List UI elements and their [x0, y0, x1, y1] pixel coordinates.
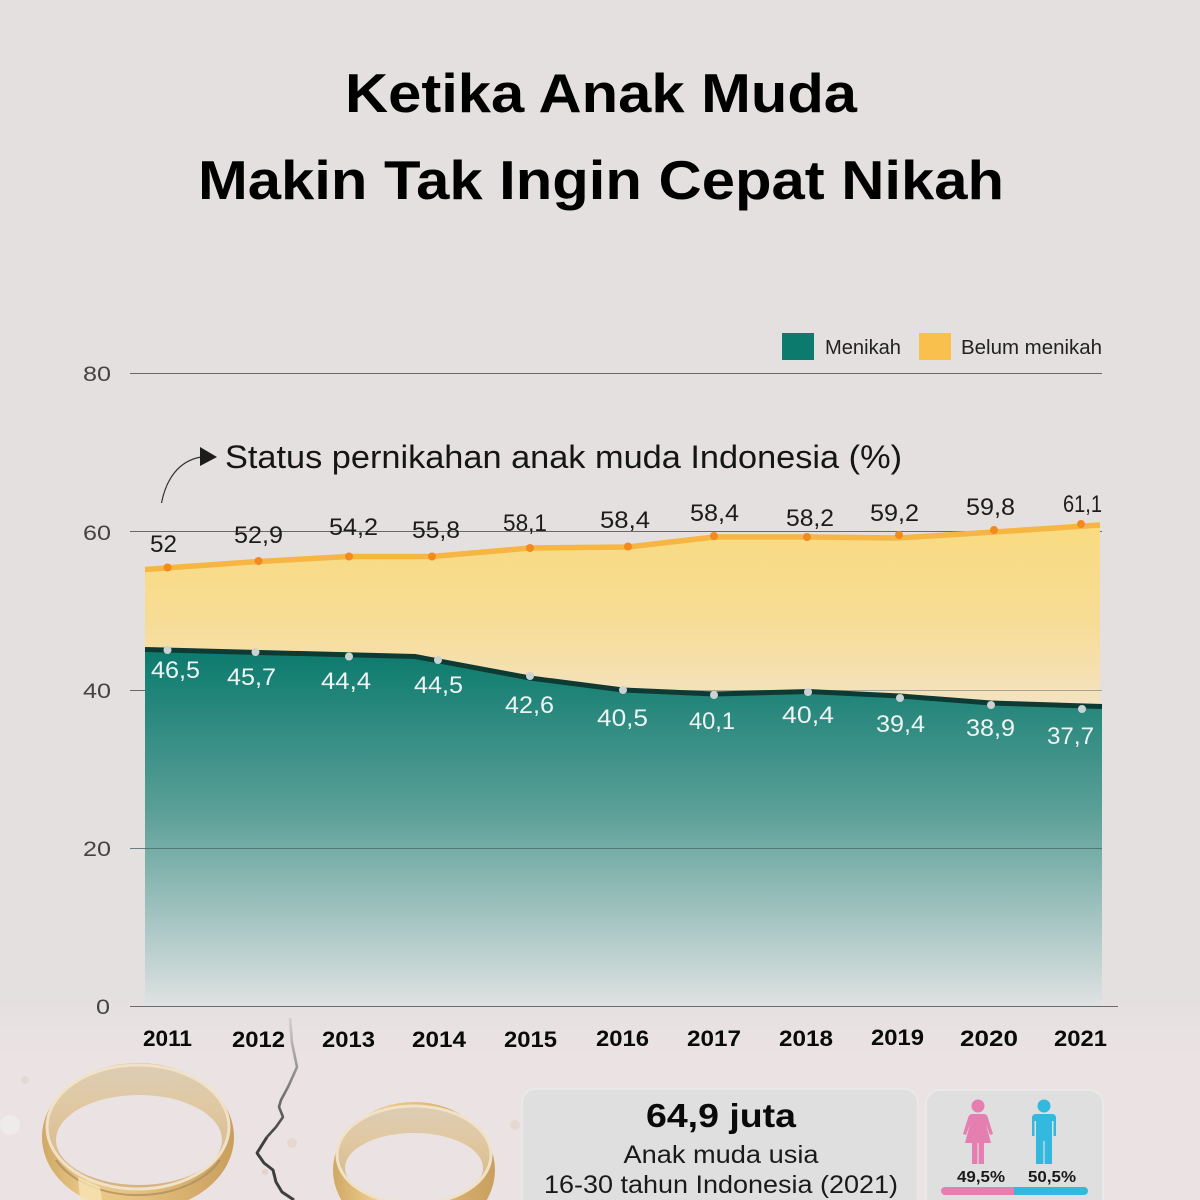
values: menikah: 42,6	[505, 692, 554, 719]
values: menikah: 37,7	[1047, 723, 1094, 750]
values: menikah: 44,5	[414, 672, 463, 699]
title: Makin Tak Ingin Cepat Nikah	[198, 149, 1004, 211]
values: belum menikah: 61,1	[1063, 491, 1102, 518]
values: belum menikah: 59,2	[870, 500, 919, 527]
grid lines over the areas	[130, 690, 1118, 1006]
values: belum menikah: 58,2	[786, 505, 834, 532]
legend: Belum menikah	[961, 337, 1102, 359]
x axis years: 2019	[871, 1025, 924, 1050]
x axis years: 2016	[596, 1026, 649, 1051]
arrow	[162, 447, 217, 503]
values: belum menikah: 52,9	[234, 522, 283, 549]
card description: Anak muda usia	[624, 1141, 819, 1169]
y axis labels	[83, 363, 111, 1019]
card description: 16-30 tahun Indonesia (2021)	[544, 1171, 898, 1199]
gender percentages: 49,5%	[957, 1169, 1005, 1186]
icon: woman	[963, 1100, 993, 1164]
right ring	[333, 1102, 495, 1200]
gender ratio bar	[941, 1187, 1088, 1195]
left ring	[42, 1063, 234, 1200]
icon: man	[1032, 1100, 1056, 1164]
x axis years: 2012	[232, 1027, 285, 1052]
values: belum menikah: 58,1	[503, 510, 547, 537]
area: belum menikah	[145, 527, 1100, 720]
values: menikah: 40,4	[782, 702, 834, 729]
x axis years: 2011	[143, 1026, 192, 1051]
x axis years: 2013	[322, 1027, 375, 1052]
grid lines behind the areas	[130, 374, 1102, 690]
values: menikah: 38,9	[966, 715, 1015, 742]
title	[198, 62, 1004, 211]
values: menikah: 40,5	[597, 705, 648, 732]
chart subtitle: Status pernikahan anak muda Indonesia (%)	[225, 439, 902, 475]
x axis years: 2015	[504, 1027, 557, 1052]
markers: belum menikah	[164, 520, 1085, 572]
values: menikah: 39,4	[876, 711, 925, 738]
values: belum menikah: 58,4	[690, 500, 739, 527]
values: belum menikah: 54,2	[329, 514, 378, 541]
gender percentages	[957, 1169, 1076, 1186]
card description	[544, 1141, 898, 1199]
legend	[782, 333, 1102, 360]
y axis labels: 40	[83, 680, 111, 703]
values: belum menikah: 55,8	[412, 517, 460, 544]
x axis years: 2018	[779, 1026, 833, 1051]
photo background: sand surface	[0, 1000, 1200, 1200]
y axis labels: 0	[96, 996, 110, 1019]
total value: 64,9 juta	[646, 1097, 797, 1134]
values: belum menikah: 58,4	[600, 507, 650, 534]
gender percentages: 50,5%	[1028, 1169, 1076, 1186]
legend: Menikah	[825, 337, 901, 359]
x axis years: 2017	[687, 1026, 741, 1051]
card: gender split	[926, 1090, 1103, 1200]
y axis labels: 60	[83, 522, 111, 545]
x axis years: 2014	[412, 1027, 467, 1052]
x axis years: 2021	[1054, 1026, 1107, 1051]
title: Ketika Anak Muda	[345, 62, 857, 124]
card: population total	[522, 1089, 918, 1200]
line: menikah	[145, 650, 1102, 706]
x axis years: 2020	[960, 1026, 1018, 1051]
values: menikah: 44,4	[321, 668, 371, 695]
values: menikah: 45,7	[227, 664, 276, 691]
values: belum menikah: 52	[150, 531, 177, 558]
values: menikah: 46,5	[151, 657, 200, 684]
y axis labels: 80	[83, 363, 111, 386]
y axis labels: 20	[83, 838, 111, 861]
values: belum menikah: 59,8	[966, 494, 1015, 521]
crack	[257, 1018, 297, 1200]
line: belum menikah	[145, 525, 1100, 570]
values: menikah: 40,1	[689, 708, 735, 735]
values: menikah	[151, 657, 1094, 750]
markers: menikah	[164, 646, 1086, 713]
area: menikah	[145, 650, 1102, 1006]
x axis years	[143, 1025, 1107, 1052]
values: belum menikah	[150, 491, 1102, 558]
